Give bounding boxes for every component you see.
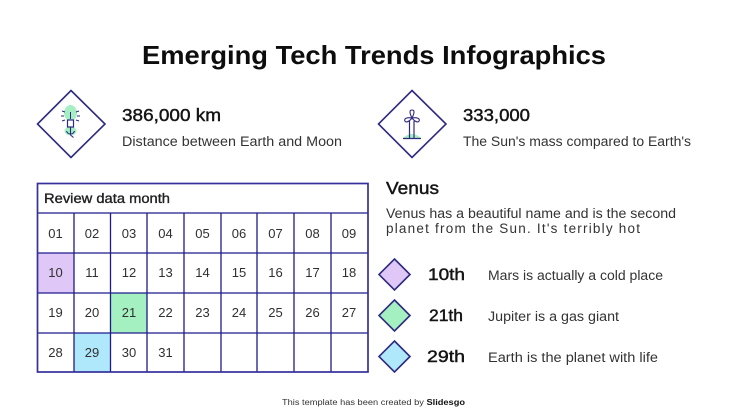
- legend: 10th: Mars is actually a cold place: [488, 268, 663, 283]
- calendar days: 10: [48, 265, 63, 280]
- calendar days: 29: [85, 345, 99, 360]
- calendar days: 01: [48, 226, 63, 241]
- calendar days: 02: [85, 226, 99, 241]
- stat description: The Sun's mass compared to Earth's: [463, 134, 691, 149]
- diamond: purple: [379, 259, 410, 290]
- title: Emerging Tech Trends Infographics: [142, 40, 606, 70]
- calendar days: 25: [268, 305, 283, 320]
- calendar days: 08: [305, 226, 320, 241]
- calendar days: 03: [122, 226, 136, 241]
- Venus heading: Venus: [386, 178, 439, 198]
- calendar days: 20: [85, 305, 99, 320]
- calendar days: 07: [268, 226, 283, 241]
- calendar days: 22: [158, 305, 173, 320]
- calendar days: 28: [48, 345, 63, 360]
- calendar days: 15: [232, 265, 246, 280]
- highlighted day cells: [37, 253, 147, 372]
- legend: 29th: Earth is the planet with life: [488, 350, 658, 365]
- stat value: 386,000 km: [122, 105, 221, 125]
- calendar days: 11: [85, 265, 99, 280]
- calendar heading: Review data month: [44, 191, 170, 206]
- calendar days: 09: [342, 226, 356, 241]
- footer credit: This template has been created by Slidesgo: [282, 398, 465, 407]
- calendar days: 12: [122, 265, 136, 280]
- legend: 10th: 10th: [428, 265, 465, 284]
- stat value: 333,000: [463, 105, 530, 125]
- calendar days: 16: [268, 265, 283, 280]
- calendar days: 05: [195, 226, 210, 241]
- stat: the Sun's mass: [378, 90, 691, 158]
- calendar days: 14: [195, 265, 210, 280]
- calendar days: 17: [305, 265, 320, 280]
- legend: 29th: 29th: [427, 347, 465, 366]
- stat: distance between Earth and Moon: [38, 90, 342, 158]
- calendar days: 30: [122, 345, 136, 360]
- icon: light bulb in diamond: [38, 90, 105, 158]
- legend: 29th: [379, 341, 658, 372]
- diamond: green: [379, 300, 410, 331]
- calendar days: 04: [158, 226, 173, 241]
- calendar days: 23: [195, 305, 210, 320]
- legend: 21th: 21th: [429, 306, 463, 325]
- calendar days: 27: [342, 305, 356, 320]
- calendar days: 24: [232, 305, 246, 320]
- Venus description: planet from the Sun. It's terribly hot: [386, 221, 640, 236]
- legend: 10th: [379, 259, 663, 290]
- diamond: blue: [379, 341, 410, 372]
- calendar days: 06: [232, 226, 246, 241]
- calendar days: 21: [122, 305, 136, 320]
- calendar table: [37, 184, 368, 372]
- legend: 21th: Jupiter is a gas giant: [488, 309, 619, 324]
- calendar days: 13: [158, 265, 173, 280]
- legend: 21th: [379, 300, 619, 331]
- calendar days: 31: [158, 345, 173, 360]
- Venus description: Venus has a beautiful name and is the second: [386, 206, 676, 221]
- icon: wind turbine in diamond: [378, 90, 446, 158]
- calendar days: 26: [305, 305, 320, 320]
- stat description: Distance between Earth and Moon: [122, 134, 342, 149]
- Venus description: [386, 206, 676, 236]
- calendar days: [48, 226, 356, 360]
- calendar days: 19: [48, 305, 63, 320]
- calendar days: 18: [342, 265, 356, 280]
